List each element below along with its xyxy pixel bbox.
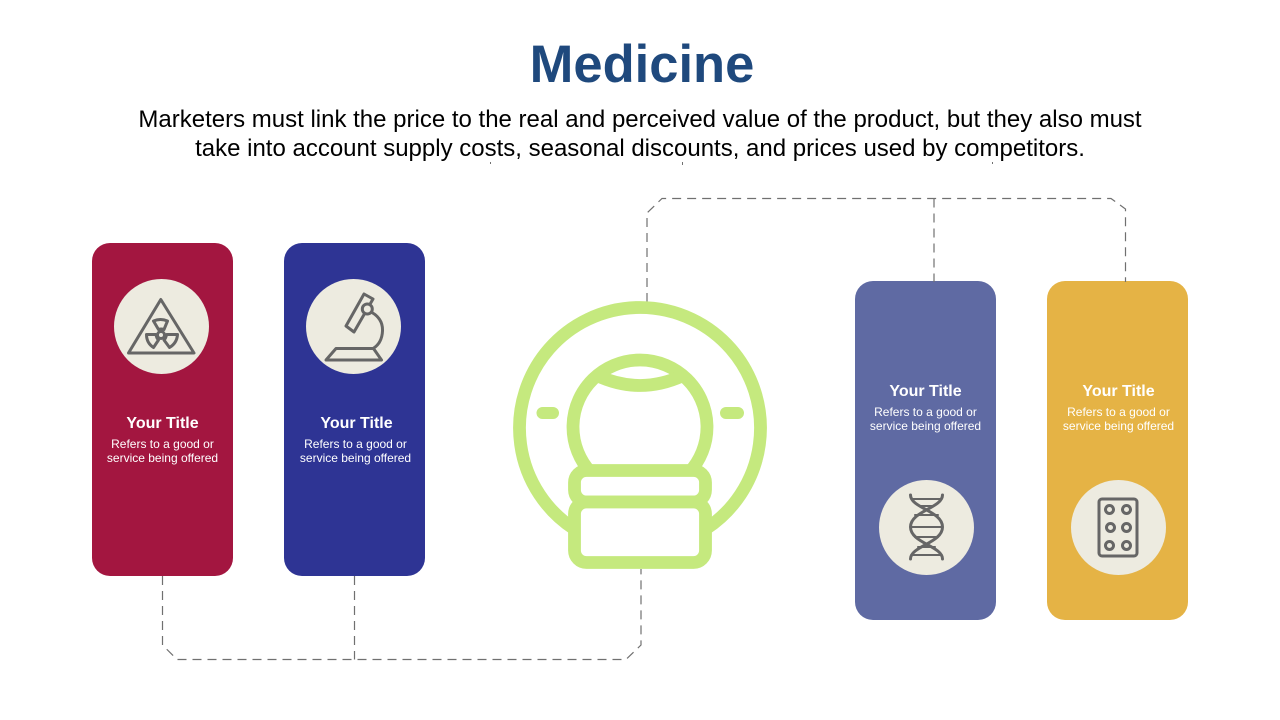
text: radiation card body: Refers to a good or (111, 437, 214, 451)
heading: DNA card title: Your Title (889, 383, 962, 400)
panel: microscope card (284, 243, 425, 576)
text: pills card body (1063, 405, 1174, 433)
text: microscope card body: Refers to a good or (304, 437, 407, 451)
panel: pills card (1047, 281, 1188, 620)
text: pills card body: service being offered (1063, 419, 1174, 433)
heading: radiation card title: Your Title (126, 415, 199, 432)
icon badge: pill pack (1071, 480, 1166, 575)
text: radiation card body (107, 437, 218, 465)
intro text: take into account supply costs, seasonal discounts, and prices used by competitors. (195, 135, 1085, 162)
text: radiation card body: service being offered (107, 451, 218, 465)
tick marks (490, 162, 992, 165)
icon badge: microscope (306, 279, 401, 374)
icon badge: DNA (879, 480, 974, 575)
icon badge: radiation (114, 279, 209, 374)
text: DNA card body: service being offered (870, 419, 981, 433)
heading: pills card title: Your Title (1082, 383, 1155, 400)
text: DNA card body (870, 405, 981, 433)
heading: microscope card title: Your Title (320, 415, 393, 432)
text: DNA card body: Refers to a good or (874, 405, 977, 419)
text: pills card body: Refers to a good or (1067, 405, 1170, 419)
connector: bottom dashed lines (162, 569, 641, 660)
panel: DNA card (855, 281, 996, 620)
intro text: Marketers must link the price to the real and perceived value of the product, but they also must (138, 106, 1142, 133)
title: Medicine (530, 35, 754, 94)
panel: radiation card (92, 243, 233, 576)
intro text (138, 106, 1142, 162)
text: microscope card body (300, 437, 411, 465)
text: microscope card body: service being offered (300, 451, 411, 465)
connector: top dashed lines (647, 198, 1126, 302)
icon: CT scanner (520, 307, 761, 562)
